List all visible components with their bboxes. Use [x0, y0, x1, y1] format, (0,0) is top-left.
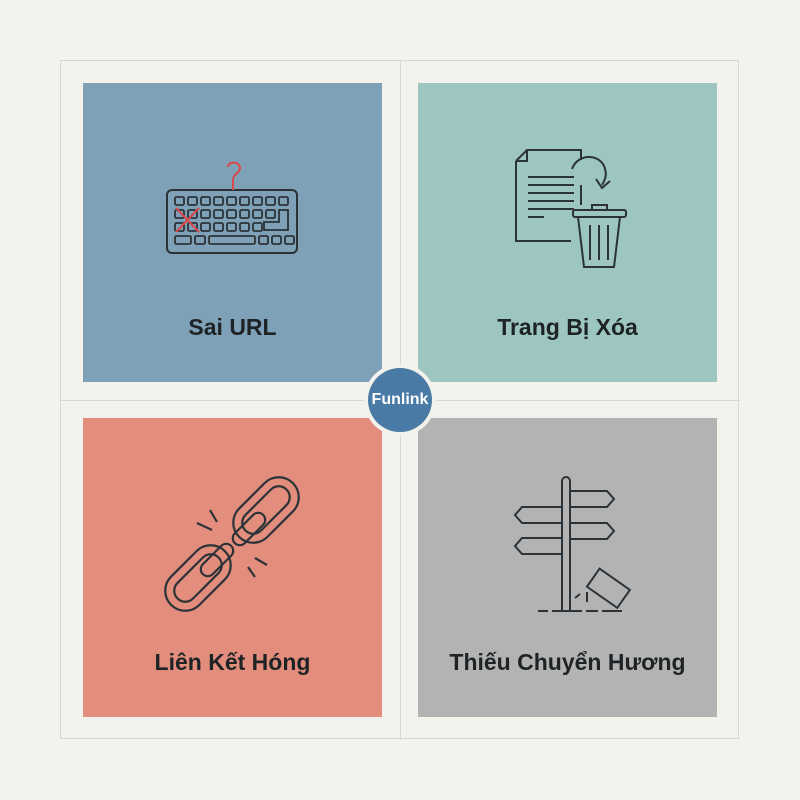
label: Trang Bị Xóa: Trang Bị Xóa — [497, 314, 638, 340]
panel: Thiếu Chuyển Hương — [418, 418, 717, 717]
label: Sai URL: Sai URL — [188, 314, 277, 340]
panel: Trang Bị Xóa — [418, 83, 717, 382]
panel: Sai URL — [83, 83, 382, 382]
logo: Funlink: Funlink — [372, 391, 428, 408]
label: Liên Kết Hóng: Liên Kết Hóng — [155, 649, 310, 675]
icon: signpost — [514, 476, 632, 612]
icon: document and trash — [515, 149, 627, 268]
icon: broken chain — [164, 476, 300, 612]
icon: keyboard — [166, 162, 298, 254]
label: Thiếu Chuyển Hương: Thiếu Chuyển Hương — [449, 649, 686, 675]
logo: Funlink — [364, 364, 436, 436]
panel: Liên Kết Hóng — [83, 418, 382, 717]
